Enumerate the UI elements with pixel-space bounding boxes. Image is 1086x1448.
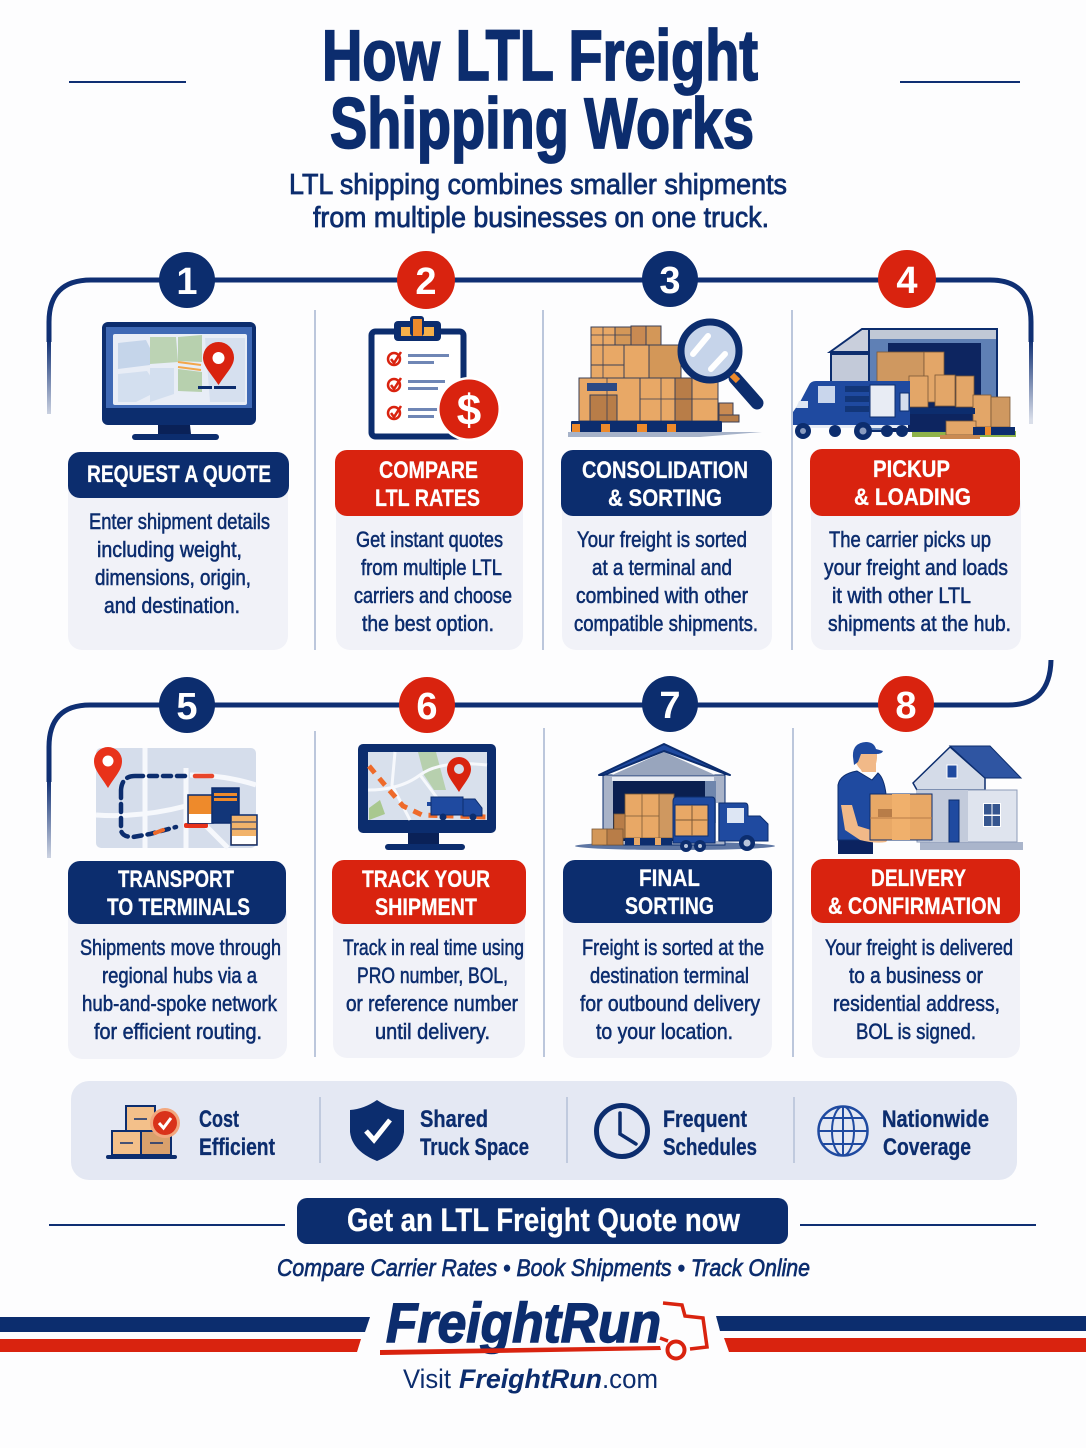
heading [68, 861, 286, 924]
step number 8: 8 [895, 685, 917, 727]
text block: Your freight is delivered [825, 935, 1013, 960]
step number 6: 6 [416, 686, 438, 728]
text block: regional hubs via a [102, 963, 258, 988]
text block: and destination. [104, 593, 240, 618]
subtitle: LTL shipping combines smaller shipments [289, 169, 787, 201]
heading [563, 860, 772, 923]
panel: step 6 track [332, 860, 526, 1058]
step number 2 [397, 251, 455, 309]
text block: Enter shipment details [89, 509, 270, 534]
text block: from multiple LTL [361, 555, 502, 580]
panel: step 4 pickup [810, 449, 1021, 650]
text block [343, 935, 524, 1044]
step number 3: 3 [659, 260, 681, 302]
call to action button [297, 1198, 788, 1244]
panel: step 2 compare rates [335, 450, 523, 650]
text block: for efficient routing. [94, 1019, 262, 1044]
text block: destination terminal [590, 963, 749, 988]
heading: FINAL [639, 865, 700, 892]
step number 8 [878, 676, 934, 732]
heading: & LOADING [854, 484, 971, 511]
step number 5 [159, 677, 215, 733]
icon: clock [596, 1106, 648, 1156]
flow connector: row 1 [49, 280, 1031, 424]
text block: carriers and choose [354, 583, 512, 608]
text block [80, 935, 281, 1044]
text block [354, 527, 512, 636]
label: nationwide coverage: Nationwide [882, 1106, 989, 1133]
text block: dimensions, origin, [95, 565, 251, 590]
heading: SHIPMENT [375, 894, 477, 921]
text block: to your location. [596, 1019, 733, 1044]
heading: DELIVERY [871, 865, 966, 892]
text block [825, 935, 1013, 1044]
step number 4: 4 [896, 260, 918, 302]
text block: BOL is signed. [856, 1019, 976, 1044]
text block: residential address, [833, 991, 1000, 1016]
heading: CONSOLIDATION [582, 457, 748, 484]
text block [580, 935, 764, 1044]
text block: to a business or [849, 963, 983, 988]
label: cost efficient [199, 1106, 275, 1161]
label: shared truck space: Truck Space [420, 1134, 529, 1161]
heading: TRACK YOUR [362, 866, 490, 893]
label: nationwide coverage [882, 1106, 989, 1161]
icon: monitor with map [102, 322, 256, 440]
heading [561, 450, 772, 516]
icon: pallet of boxes with magnifier [568, 322, 762, 437]
label: cost efficient: Cost [199, 1106, 239, 1133]
logo: FreightRun: FreightRun [386, 1291, 661, 1354]
text block: compatible shipments. [574, 611, 758, 636]
heading [811, 859, 1020, 923]
step number 7: 7 [659, 685, 681, 727]
panel: step 8 delivery [811, 859, 1020, 1058]
icon: checklist clipboard with dollar [372, 316, 501, 441]
label: frequent schedules: Frequent [663, 1106, 747, 1133]
step number 4 [878, 250, 936, 308]
text block: combined with other [576, 583, 748, 608]
footer stripes [0, 1316, 1086, 1352]
subtitle: from multiple businesses on one truck. [313, 202, 769, 234]
text block: it with other LTL [832, 583, 971, 608]
text block: the best option. [362, 611, 494, 636]
heading [68, 452, 289, 498]
heading: & SORTING [608, 485, 722, 512]
text block: Track in real time using [343, 935, 524, 960]
label: nationwide coverage: Coverage [883, 1134, 971, 1161]
step number 1 [159, 252, 215, 308]
website link: .com [602, 1364, 658, 1394]
title [322, 17, 758, 164]
heading [335, 450, 523, 516]
text block: hub-and-spoke network [82, 991, 278, 1016]
website link: Visit [403, 1364, 451, 1394]
text block: for outbound delivery [580, 991, 760, 1016]
panel: step 3 consolidation [561, 450, 772, 650]
label: shared truck space [420, 1106, 529, 1161]
icon: truck loading at warehouse [793, 329, 1016, 440]
text block: including weight, [97, 537, 242, 562]
text block: until delivery. [375, 1019, 490, 1044]
panel: step 1 request a quote [68, 452, 289, 650]
step number 6 [399, 677, 455, 733]
icon: warehouse with delivery truck [575, 744, 775, 852]
text block: Shipments move through [80, 935, 281, 960]
tagline: Compare Carrier Rates • Book Shipments • Track Online [277, 1255, 810, 1282]
heading: REQUEST A QUOTE [87, 461, 271, 488]
icon: route map with terminals [94, 747, 257, 848]
text block: your freight and loads [824, 555, 1008, 580]
heading: PICKUP [873, 456, 950, 483]
step number 3 [642, 251, 698, 307]
text block: Your freight is sorted [577, 527, 747, 552]
icon: delivery driver and house [838, 742, 1023, 854]
title: Shipping Works [330, 85, 754, 164]
text block: at a terminal and [592, 555, 732, 580]
icon: globe [818, 1106, 868, 1156]
subtitle [289, 169, 787, 234]
text block: shipments at the hub. [828, 611, 1011, 636]
label: shared truck space: Shared [420, 1106, 488, 1133]
icon: boxes with check [106, 1106, 180, 1159]
step number 2: 2 [415, 261, 437, 303]
step number 5: 5 [176, 686, 198, 728]
heading: & CONFIRMATION [828, 893, 1001, 920]
heading: TO TERMINALS [107, 894, 250, 921]
website link: FreightRun [459, 1364, 602, 1394]
icon: shield check [350, 1100, 404, 1161]
text block: or reference number [346, 991, 518, 1016]
heading: COMPARE [379, 457, 478, 484]
icon: tracking monitor [358, 744, 496, 850]
text block: Freight is sorted at the [582, 935, 764, 960]
website link [403, 1364, 658, 1394]
label: frequent schedules: Schedules [663, 1134, 757, 1161]
panel: step 7 final sorting [563, 860, 772, 1058]
title: How LTL Freight [322, 17, 758, 96]
heading: SORTING [625, 893, 714, 920]
heading [810, 449, 1020, 516]
step number 1: 1 [176, 261, 198, 303]
flow connector: row 2 [49, 660, 1051, 858]
call to action button: Get an LTL Freight Quote now [347, 1202, 740, 1238]
step number 7 [642, 676, 698, 732]
icon: checklist clipboard with dollar: $ [457, 386, 481, 435]
text block [574, 527, 758, 636]
label: frequent schedules [663, 1106, 757, 1161]
text block: Get instant quotes [356, 527, 503, 552]
text block: PRO number, BOL, [357, 963, 508, 988]
heading: TRANSPORT [118, 866, 234, 893]
label: cost efficient: Efficient [199, 1134, 275, 1161]
panel: step 5 transport [68, 861, 287, 1059]
text block [89, 509, 270, 618]
heading: LTL RATES [375, 485, 480, 512]
heading [332, 860, 526, 924]
text block: The carrier picks up [829, 527, 991, 552]
panel: benefits bar [71, 1081, 1017, 1180]
text block [824, 527, 1011, 636]
